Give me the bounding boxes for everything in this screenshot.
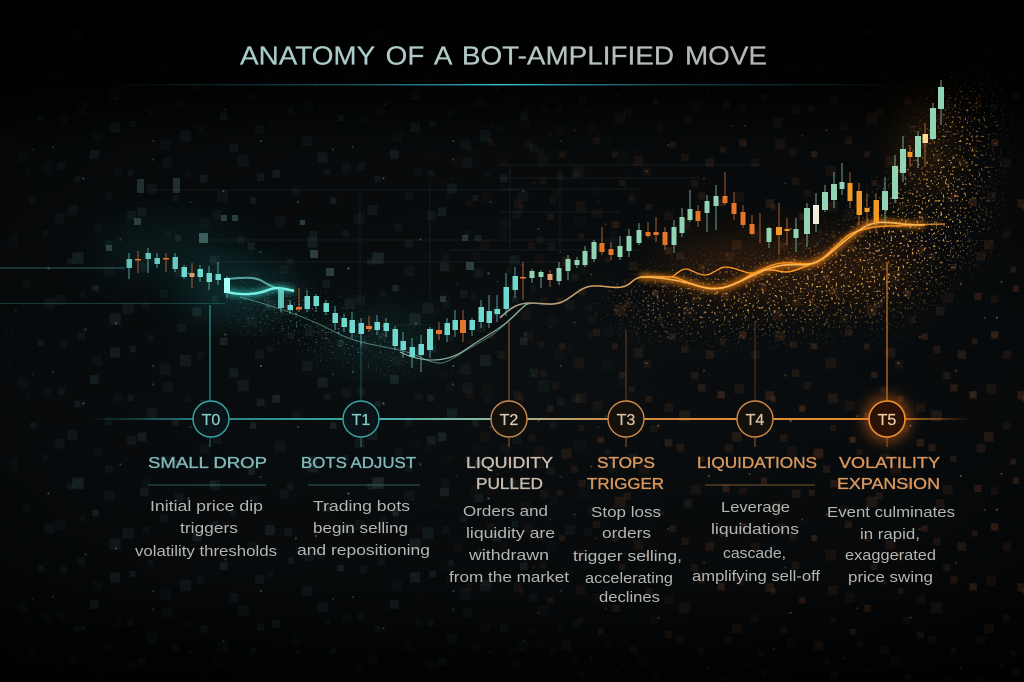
- heading: liquidity pulled: LIQUIDITY: [466, 455, 553, 472]
- step T2: [449, 401, 570, 586]
- heading: liquidations: LIQUIDATIONS: [697, 455, 817, 472]
- heading: liquidity pulled: PULLED: [476, 476, 543, 493]
- bodies: orange: [135, 196, 754, 334]
- description: volatility expansion: price swing: [848, 569, 933, 586]
- description: bots adjust: begin selling: [313, 520, 408, 537]
- description: liquidations: Leverage: [721, 499, 790, 516]
- bodies: amber: [776, 134, 928, 235]
- wicks: orange section left: [138, 251, 550, 342]
- wicks: orange section right: [602, 123, 925, 260]
- bodies: green: [530, 87, 944, 281]
- heading: small drop: SMALL DROP: [148, 455, 267, 472]
- description: volatility expansion: Event culminates: [827, 504, 955, 521]
- description: bots adjust: Trading bots: [313, 498, 410, 515]
- teal price ribbons: [0, 268, 294, 294]
- description: volatility expansion: [827, 504, 955, 586]
- description: small drop: Initial price dip: [150, 498, 263, 515]
- description: liquidations: liquidations: [711, 521, 799, 538]
- heading: volatility expansion: EXPANSION: [837, 476, 940, 493]
- step T3: [573, 401, 682, 606]
- connector lines: [210, 262, 887, 447]
- heading: stops trigger: TRIGGER: [587, 476, 664, 493]
- description: liquidity pulled: Orders and: [463, 503, 548, 520]
- bodies: teal: [126, 253, 518, 357]
- candlestick chart: [126, 80, 944, 372]
- glow: teal and orange ambience: [90, 100, 951, 365]
- description: liquidations: [692, 499, 821, 585]
- step T1: [297, 401, 430, 559]
- step T3: T3: [617, 412, 635, 429]
- step T4: T4: [746, 412, 764, 429]
- wicks: teal section: [129, 248, 515, 372]
- heading: stops trigger: STOPS: [597, 455, 655, 472]
- description: small drop: [135, 498, 277, 560]
- heading: volatility expansion: VOLATILITY: [839, 455, 940, 472]
- heading: volatility expansion: [837, 455, 940, 493]
- orange volatility curves: [500, 222, 945, 318]
- description: liquidity pulled: [449, 503, 570, 586]
- step T0: T0: [202, 412, 220, 429]
- description: bots adjust: and repositioning: [297, 542, 430, 559]
- step T0: [135, 401, 277, 560]
- description: stops trigger: accelerating: [585, 570, 673, 587]
- step T4: [692, 401, 821, 585]
- particle fields: [200, 50, 1024, 380]
- step T2: T2: [500, 412, 518, 429]
- description: liquidity pulled: liquidity are: [466, 525, 555, 542]
- heading: stops trigger: [587, 455, 664, 493]
- step T5: T5: [878, 412, 896, 429]
- description: stops trigger: Stop loss: [591, 504, 661, 521]
- description: stops trigger: [573, 504, 682, 606]
- description: bots adjust: [297, 498, 430, 559]
- title: ANATOMY OF A BOT-AMPLIFIED MOVE: [240, 42, 767, 70]
- step T1: T1: [352, 412, 370, 429]
- description: liquidations: cascade,: [723, 545, 786, 562]
- heading: bots adjust: BOTS ADJUST: [301, 455, 417, 472]
- description: volatility expansion: exaggerated: [845, 547, 936, 564]
- heading: liquidity pulled: [466, 455, 553, 493]
- description: stops trigger: declines: [599, 589, 660, 606]
- step T5: [827, 395, 955, 586]
- title underline: [100, 84, 910, 85]
- wicks: green section: [532, 80, 941, 288]
- description: liquidity pulled: from the market: [449, 569, 570, 586]
- description: volatility expansion: in rapid,: [860, 526, 920, 543]
- price trail: dotted teal to pale line: [240, 297, 535, 363]
- description: liquidity pulled: withdrawn: [468, 547, 549, 564]
- description: stops trigger: orders: [602, 525, 651, 542]
- timeline: [90, 418, 970, 420]
- description: liquidations: amplifying sell-off: [692, 568, 821, 585]
- description: stops trigger: trigger selling,: [573, 548, 682, 565]
- description: small drop: volatility thresholds: [135, 543, 277, 560]
- description: small drop: triggers: [180, 520, 238, 537]
